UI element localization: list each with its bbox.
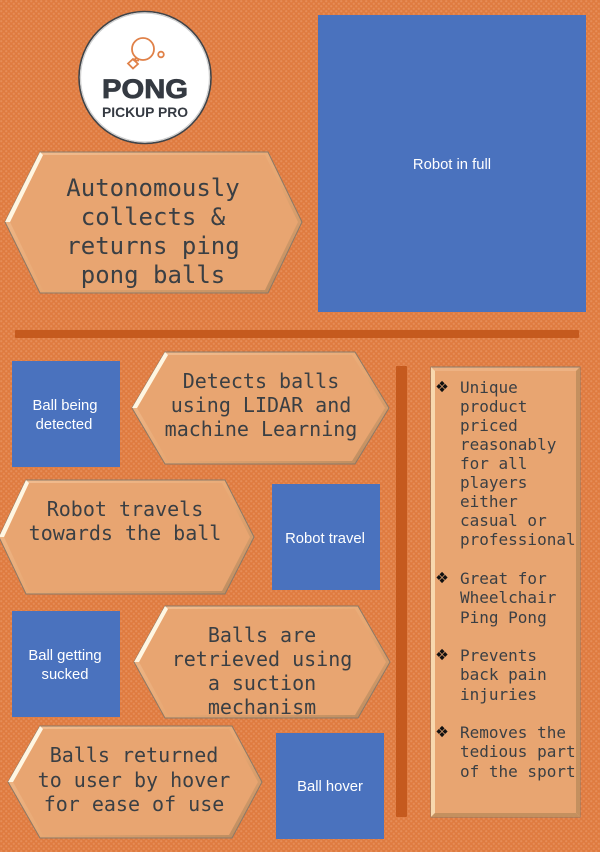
benefit: unique product: for all [460, 454, 527, 473]
benefit: back pain: ❖ [436, 641, 448, 665]
hexagon: balls returned [8, 726, 262, 838]
hexagon: balls returned: Balls returned [50, 743, 218, 767]
benefit: unique product: ❖ [436, 373, 448, 397]
benefit: unique product: either [460, 492, 518, 511]
hexagon: headline: pong balls [81, 261, 225, 289]
logo badge [79, 12, 211, 144]
benefit: tedious part: tedious part [460, 742, 576, 761]
image placeholder: ball being detected [12, 361, 120, 467]
hexagon: balls returned: for ease of use [44, 792, 224, 816]
hexagon: balls retrieved [134, 606, 390, 719]
image placeholder: robot travel: Robot travel [285, 531, 365, 547]
benefit: unique product: professional [460, 530, 576, 549]
benefit: wheelchair [436, 564, 557, 627]
vertical divider [396, 366, 407, 817]
image placeholder: robot travel [272, 484, 380, 590]
hexagon: robot travels: Robot travels [47, 497, 203, 521]
benefit: wheelchair: Ping Pong [460, 608, 547, 627]
benefit: unique product: players [460, 473, 527, 492]
logo wordmark: PICKUP PRO [102, 104, 188, 120]
benefit: back pain [436, 641, 547, 704]
logo wordmark: PONG [102, 74, 188, 104]
benefit: back pain: Prevents [460, 646, 537, 665]
hexagon: detects balls: machine Learning [165, 417, 357, 441]
horizontal divider [15, 330, 579, 338]
image placeholder: ball being detected: Ball being [32, 398, 98, 414]
benefit: wheelchair: Wheelchair [460, 588, 557, 607]
benefit: back pain: injuries [460, 685, 537, 704]
hexagon: headline: Autonomously [66, 174, 240, 202]
image placeholder: robot in full: Robot in full [413, 157, 491, 173]
benefit: tedious part: of the sport [460, 762, 576, 781]
hexagon: headline: collects & [81, 203, 226, 231]
hexagon: balls retrieved: retrieved using [172, 647, 352, 671]
image placeholder: ball getting sucked: Ball getting [28, 648, 102, 664]
hexagon: detects balls: using LIDAR and [171, 393, 351, 417]
benefit: tedious part [436, 718, 576, 781]
benefit: unique product: casual or [460, 511, 547, 530]
benefit: wheelchair: ❖ [436, 564, 448, 588]
benefit: unique product: Unique [460, 378, 518, 397]
hexagon: balls retrieved: a suction [208, 671, 316, 695]
benefit: unique product: product [460, 397, 527, 416]
panel: benefits list [431, 367, 580, 817]
benefit: tedious part: ❖ [436, 718, 448, 742]
hexagon: detects balls [132, 352, 389, 464]
hexagon: balls retrieved: Balls are [208, 623, 316, 647]
hexagon: headline: returns ping [66, 232, 240, 260]
benefit: unique product [436, 373, 576, 549]
image placeholder: ball getting sucked [12, 611, 120, 717]
benefit: wheelchair: Great for [460, 569, 547, 588]
image placeholder: ball getting sucked: sucked [42, 667, 88, 683]
hexagon: balls returned: to user by hover [38, 768, 230, 792]
benefit: back pain: back pain [460, 665, 547, 684]
hexagon: robot travels [0, 480, 254, 594]
image placeholder: ball hover [276, 733, 384, 839]
image placeholder: ball being detected: detected [36, 417, 92, 433]
hexagon: balls retrieved: mechanism [208, 695, 316, 719]
hexagon: headline [5, 152, 302, 293]
hexagon: robot travels: towards the ball [29, 521, 221, 545]
image placeholder: ball hover: Ball hover [297, 779, 363, 795]
benefit: tedious part: Removes the [460, 723, 566, 742]
logo wordmark [102, 74, 188, 120]
benefit: unique product: priced [460, 416, 518, 435]
benefit: unique product: reasonably [460, 435, 557, 454]
image placeholder: robot in full [318, 15, 586, 312]
hexagon: detects balls: Detects balls [183, 369, 339, 393]
icon: paddle [128, 38, 164, 68]
